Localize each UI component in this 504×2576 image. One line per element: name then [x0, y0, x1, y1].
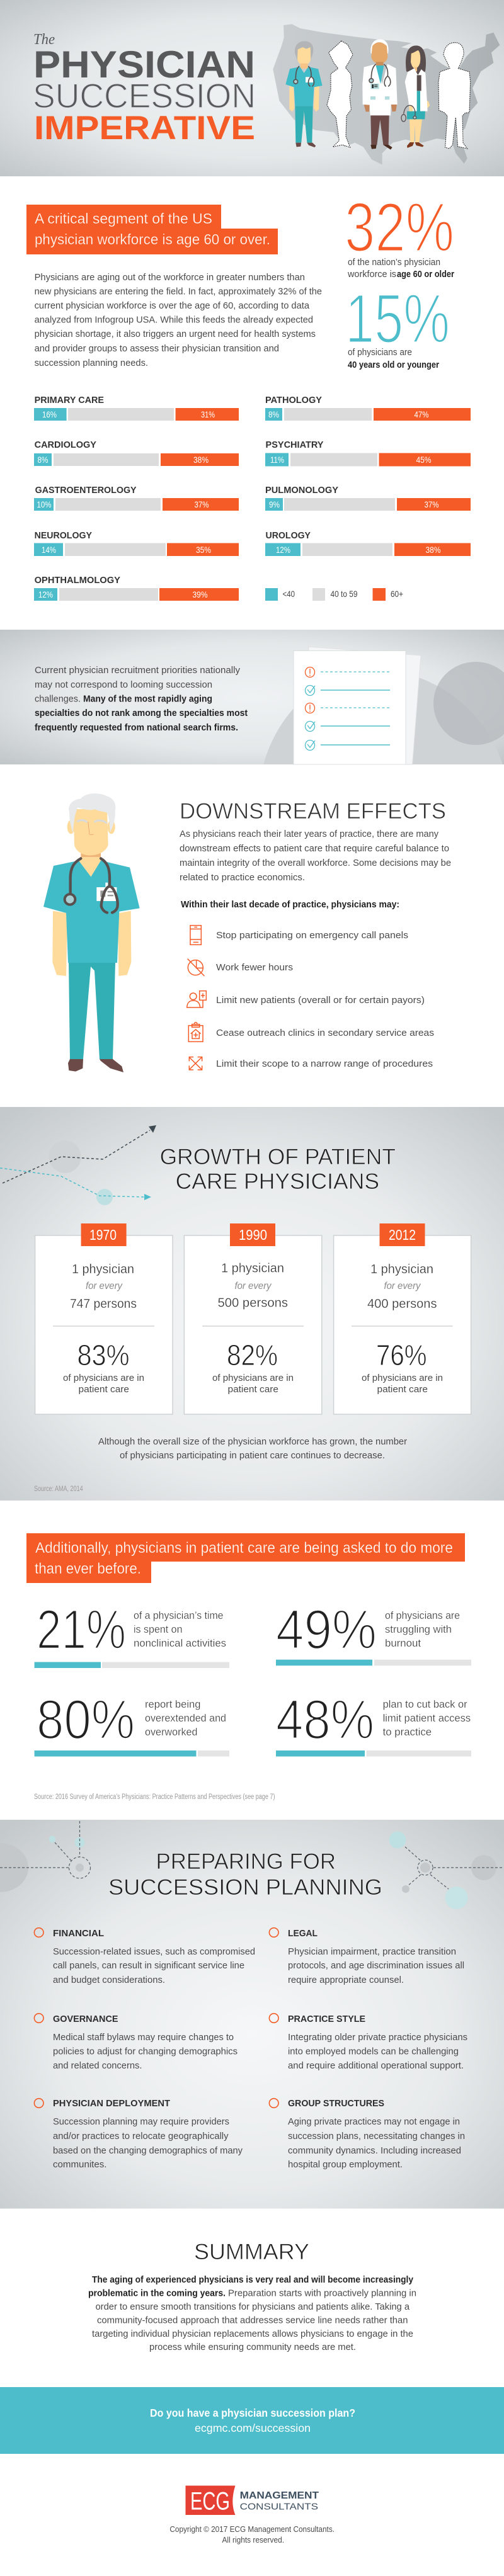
stat: 80%: overextended and	[145, 1712, 226, 1724]
card: 1970: for every	[86, 1281, 123, 1291]
item: group structures: succession plans, necessitating changes in	[288, 2131, 465, 2142]
recruitment text: Many of the most rapidly aging	[83, 694, 212, 704]
panel: call to action: Do you have a physician succession plan?	[150, 2407, 355, 2419]
bar: ophthalmology: 39%	[193, 589, 208, 599]
panel: specialty age bars	[34, 395, 471, 601]
card: 2012: 1 physician	[370, 1262, 433, 1276]
heading: GROWTH OF PATIENT	[160, 1145, 396, 1169]
orange headline	[26, 1533, 465, 1583]
intro paragraph: and provider groups to assess their physician transition and	[35, 343, 279, 354]
intro paragraph: analyzed from Infogroup USA. While this feeds the already expected	[35, 315, 313, 325]
panel: growth of patient care physicians	[0, 1107, 504, 1501]
title: IMPERATIVE	[34, 110, 255, 147]
stat: 15%: 15%	[345, 280, 450, 358]
item text: Limit their scope to a narrow range of procedures	[216, 1058, 433, 1069]
item: physician deployment: Succession planning may require providers	[53, 2116, 229, 2127]
stat: 48%: to practice	[383, 1726, 432, 1738]
bar: pathology: PATHOLOGY	[265, 395, 322, 406]
bar: cardiology: 8%	[38, 455, 48, 465]
item: financial: and budget considerations.	[53, 1975, 165, 1985]
item: group structures: community dynamics. Including increased	[288, 2145, 461, 2156]
panel: downstream effects	[43, 793, 451, 1072]
physician in white coat	[362, 39, 398, 150]
bar: neurology: NEUROLOGY	[35, 531, 92, 541]
item: legal: Physician impairment, practice transition	[288, 1946, 456, 1957]
item: practice style: into employed models can be challenging	[288, 2046, 459, 2057]
item: physician deployment: communites.	[53, 2159, 107, 2170]
bar: psychiatry: 11%	[270, 455, 284, 465]
heading: SUCCESSION PLANNING	[108, 1875, 382, 1900]
bar: primary care: 16%	[42, 409, 57, 419]
bar: cardiology	[34, 440, 239, 466]
map silhouette	[273, 24, 500, 165]
panel: summary	[88, 2240, 416, 2352]
stat: 32%: 32%	[345, 189, 454, 266]
summary text: The aging of experienced physicians is very real and will become increasingly	[92, 2274, 414, 2285]
recruitment text: specialties do not rank among the specialties most	[35, 708, 248, 718]
stat: 49%: burnout	[385, 1637, 421, 1649]
stat: 48%: 48%	[276, 1688, 374, 1750]
summary text: community-focused approach that addresses service line needs rather than	[97, 2315, 408, 2326]
bar: primary care: 31%	[201, 409, 215, 419]
orange headline: physician workforce is age 60 or over.	[35, 231, 270, 247]
stat: 32%: age 60 or older	[397, 269, 454, 280]
stat: 80%: 80%	[37, 1688, 135, 1750]
card: 1990: for every	[234, 1281, 272, 1291]
icon: patient limit	[187, 991, 206, 1007]
checklist document	[294, 647, 421, 764]
stat: 49%: of physicians are	[385, 1609, 460, 1621]
icon: narrow scope	[189, 1057, 202, 1070]
card: 1970: of physicians are in	[63, 1373, 144, 1383]
downstream text: related to practice economics.	[180, 872, 305, 883]
panel: call to action	[0, 2387, 504, 2454]
legend: <40	[282, 589, 295, 599]
item text: Cease outreach clinics in secondary service areas	[216, 1028, 434, 1038]
source: Source: 2016 Survey of America’s Physicians: Practice Patterns and Perspectives (see page 7)	[34, 1793, 275, 1801]
bar: pathology: 47%	[415, 409, 428, 419]
panel: workforce intro	[26, 189, 454, 370]
network decoration left	[0, 1821, 91, 1892]
card: 1990: patient care	[228, 1384, 278, 1395]
bar: neurology: 35%	[196, 545, 211, 555]
stat: 49%	[276, 1598, 471, 1665]
card: 2012	[334, 1223, 471, 1414]
summary text: targeting individual physician replacements allows physicians to engage in the	[92, 2329, 413, 2339]
recruitment text: may not correspond to looming succession	[35, 679, 212, 690]
card: 1990: 500 persons	[218, 1296, 288, 1310]
legend: 60+	[391, 589, 403, 599]
stat: 21%: nonclinical activities	[134, 1637, 226, 1649]
card: 1970: patient care	[78, 1384, 129, 1395]
bar: urology	[265, 531, 471, 556]
logo	[185, 2486, 319, 2515]
item: group structures: hospital group employment.	[288, 2159, 403, 2170]
heading: CARE PHYSICIANS	[176, 1169, 379, 1194]
legend: 40 to 59	[330, 589, 358, 599]
panel: recruitment priorities	[0, 630, 504, 764]
card: 1970: 1970	[89, 1227, 117, 1243]
stat: 32%: of the nation’s physician	[348, 257, 440, 268]
orange headline: than ever before.	[35, 1560, 141, 1577]
title: SUCCESSION	[33, 76, 256, 115]
item: physician deployment: and/or practices to relocate geographically	[53, 2131, 229, 2142]
summary text	[88, 2274, 416, 2352]
stat: 21%: 21%	[37, 1598, 126, 1660]
item: governance: and related concerns.	[53, 2060, 142, 2071]
stat: 49%: struggling with	[385, 1623, 452, 1635]
stat: 15%: of physicians are	[348, 347, 412, 358]
downstream text: downstream effects to patient care that require careful balance to	[180, 843, 449, 854]
recruitment text: frequently requested from national search firms.	[35, 722, 238, 733]
legend	[265, 588, 403, 601]
icon: no clock	[188, 959, 204, 976]
item: legal: LEGAL	[288, 1928, 318, 1939]
intro paragraph: current physician workforce is over the age of 60, according to data	[35, 300, 310, 311]
downstream text	[180, 829, 451, 883]
stat: 21%: is spent on	[134, 1623, 183, 1635]
warning item	[305, 703, 389, 713]
intro paragraph: new physicians are entering the field. In fact, approximately 32% of the	[35, 286, 322, 297]
title: PHYSICIAN	[33, 43, 255, 86]
item: financial: Succession-related issues, such as compromised	[53, 1946, 255, 1957]
item text: Limit new patients (overall or for certain payors)	[216, 995, 425, 1006]
stat: 49%: 49%	[276, 1598, 377, 1660]
orange headline: A critical segment of the US	[35, 210, 212, 227]
growth note	[98, 1436, 407, 1461]
orange headline	[26, 205, 278, 254]
icon: clipboard clinic	[188, 1023, 203, 1041]
stat: 48%: plan to cut back or	[383, 1698, 467, 1710]
bar: neurology	[34, 531, 239, 556]
bar: pathology	[265, 395, 471, 421]
summary text: process while ensuring community needs are met.	[149, 2342, 356, 2352]
stat: 48%	[276, 1688, 471, 1757]
item: financial: call panels, can result in significant service line	[53, 1960, 244, 1971]
card: 1970: 1 physician	[72, 1262, 134, 1276]
network decoration right	[389, 1831, 504, 1909]
panel: header	[0, 0, 504, 176]
icon: phone	[190, 926, 201, 945]
growth note: Although the overall size of the physician workforce has grown, the number	[98, 1436, 407, 1447]
recruitment text	[35, 665, 248, 733]
logo: ECG	[190, 2487, 230, 2515]
bar: pulmonology: PULMONOLOGY	[265, 485, 338, 496]
stat: 32%	[345, 189, 454, 280]
summary text: Preparation starts with proactively planning in	[228, 2288, 416, 2298]
panel: call to action: ecgmc.com/succession	[195, 2422, 311, 2434]
bar: pulmonology	[265, 485, 471, 511]
bar: urology: 38%	[426, 545, 441, 555]
item: financial: FINANCIAL	[53, 1928, 104, 1939]
card: 1970: 747 persons	[70, 1297, 137, 1311]
subheading: Within their last decade of practice, physicians may:	[181, 899, 399, 910]
item text: Work fewer hours	[216, 962, 293, 973]
bar: pathology: 8%	[268, 409, 279, 419]
warning item	[305, 667, 389, 678]
item: governance: policies to adjust for changing demographics	[53, 2046, 238, 2057]
copyright: Copyright © 2017 ECG Management Consultants.	[169, 2524, 335, 2534]
item: physician deployment: PHYSICIAN DEPLOYMENT	[53, 2098, 170, 2109]
item: governance: GOVERNANCE	[53, 2014, 118, 2024]
heading: DOWNSTREAM EFFECTS	[180, 799, 446, 824]
panel: footer	[169, 2486, 335, 2545]
bar: ophthalmology	[34, 576, 239, 601]
logo: CONSULTANTS	[240, 2501, 318, 2512]
downstream text: As physicians reach their later years of practice, there are many	[180, 829, 438, 839]
item text: Stop participating on emergency call panels	[216, 930, 408, 941]
card: 1970	[35, 1223, 173, 1414]
card: 1970: 83%	[77, 1339, 130, 1371]
card: 2012: 76%	[376, 1339, 427, 1371]
item: physician deployment: based on the changing demographics of many	[53, 2145, 243, 2156]
item: group structures	[269, 2098, 465, 2170]
stat: 15%	[345, 280, 450, 370]
bar: urology: UROLOGY	[266, 531, 311, 541]
title	[33, 31, 256, 147]
card: 1990: 1990	[239, 1227, 267, 1243]
item: group structures: Aging private practices may not engage in	[288, 2116, 460, 2127]
summary text: problematic in the coming years.	[88, 2288, 226, 2298]
heading: PREPARING FOR	[156, 1849, 336, 1874]
check item	[305, 740, 390, 751]
trend arrows	[0, 1125, 156, 1205]
item: physician deployment	[34, 2098, 243, 2170]
downstream text: maintain integrity of the overall workforce. Some decisions may be	[180, 858, 451, 868]
dashed silhouette: woman	[327, 41, 353, 147]
bar: ophthalmology: OPHTHALMOLOGY	[35, 576, 120, 586]
card: 2012: for every	[384, 1281, 421, 1291]
item: legal: require appropriate counsel.	[288, 1975, 404, 1985]
summary text: order to ensure smooth transitions for physicians and patients alike. Taking a	[96, 2301, 410, 2312]
panel: preparing for succession planning	[0, 1820, 504, 2209]
heading: SUMMARY	[194, 2240, 309, 2264]
bar: pulmonology: 37%	[425, 499, 438, 509]
stat: 21%: of a physician’s time	[134, 1609, 223, 1621]
bar: primary care	[34, 395, 239, 421]
bar: psychiatry	[265, 440, 471, 466]
heading	[108, 1849, 382, 1900]
decorative background shapes	[263, 662, 504, 764]
bar: psychiatry: PSYCHIATRY	[266, 440, 324, 450]
source: Source: AMA, 2014	[34, 1485, 83, 1493]
growth note: of physicians participating in patient care continues to decrease.	[120, 1450, 385, 1461]
title: The	[33, 31, 55, 48]
item: group structures: GROUP STRUCTURES	[288, 2098, 384, 2109]
card: 1990: 1 physician	[221, 1262, 284, 1276]
card: 2012: 400 persons	[367, 1297, 437, 1311]
icon list	[187, 926, 434, 1070]
bar: gastroenterology	[34, 485, 239, 511]
check item	[305, 722, 390, 732]
bar: primary care: PRIMARY CARE	[35, 395, 104, 406]
dashed silhouette: man	[438, 43, 471, 149]
item: practice style: Integrating older private practice physicians	[288, 2032, 467, 2043]
stat: 80%: report being	[145, 1698, 200, 1710]
item: governance	[34, 2014, 238, 2071]
item: practice style: and require additional operational support.	[288, 2060, 464, 2071]
bar: ophthalmology: 12%	[38, 589, 53, 599]
item: financial	[34, 1928, 255, 1985]
intro paragraph: succession planning needs.	[35, 358, 148, 368]
stat: 80%: overworked	[145, 1726, 198, 1738]
bar: neurology: 14%	[42, 545, 56, 555]
bar: urology: 12%	[276, 545, 290, 555]
card: 2012: patient care	[377, 1384, 428, 1395]
copyright: All rights reserved.	[222, 2535, 284, 2545]
card: 2012: of physicians are in	[362, 1373, 443, 1383]
card: 1990: 82%	[227, 1339, 278, 1371]
bar: pulmonology: 9%	[269, 499, 280, 509]
item: governance: Medical staff bylaws may require changes to	[53, 2032, 234, 2043]
recruitment text: challenges.	[35, 694, 81, 704]
check item	[305, 685, 390, 695]
bar: cardiology: 38%	[193, 455, 209, 465]
intro paragraph: physician shortage, it also triggers an urgent need for health systems	[35, 329, 316, 339]
orange headline: Additionally, physicians in patient care are being asked to do more	[35, 1540, 453, 1557]
intro paragraph: Physicians are aging out of the workforce in greater numbers than	[35, 272, 305, 283]
item: practice style	[269, 2014, 467, 2071]
intro paragraph	[35, 272, 322, 368]
bar: psychiatry: 45%	[416, 455, 431, 465]
physician in scrubs	[285, 41, 323, 147]
bar: gastroenterology: 10%	[37, 499, 52, 509]
stat: 21%	[35, 1598, 229, 1668]
item: legal	[269, 1928, 464, 1985]
card: 2012: 2012	[389, 1227, 416, 1243]
stat: 48%: limit patient access	[383, 1712, 471, 1724]
item: legal: protocols, and age discrimination issues all	[288, 1960, 464, 1971]
card: 1990: of physicians are in	[212, 1373, 294, 1383]
bar: gastroenterology: 37%	[194, 499, 209, 509]
stat: 15%: 40 years old or younger	[348, 360, 439, 370]
item: practice style: PRACTICE STYLE	[288, 2014, 365, 2024]
recruitment text: Current physician recruitment priorities nationally	[35, 665, 240, 676]
US map with physicians	[273, 24, 500, 165]
physician woman	[401, 45, 430, 148]
copyright	[169, 2524, 335, 2545]
senior physician illustration	[43, 793, 140, 1072]
logo: MANAGEMENT	[240, 2490, 319, 2501]
heading	[160, 1145, 396, 1194]
bar: gastroenterology: GASTROENTEROLOGY	[35, 485, 137, 496]
panel: doing more than ever	[26, 1533, 471, 1801]
bar: cardiology: CARDIOLOGY	[35, 440, 96, 450]
stat: 80%	[35, 1688, 229, 1757]
stat: 32%: workforce is	[347, 269, 396, 280]
card: 1990	[184, 1223, 322, 1414]
